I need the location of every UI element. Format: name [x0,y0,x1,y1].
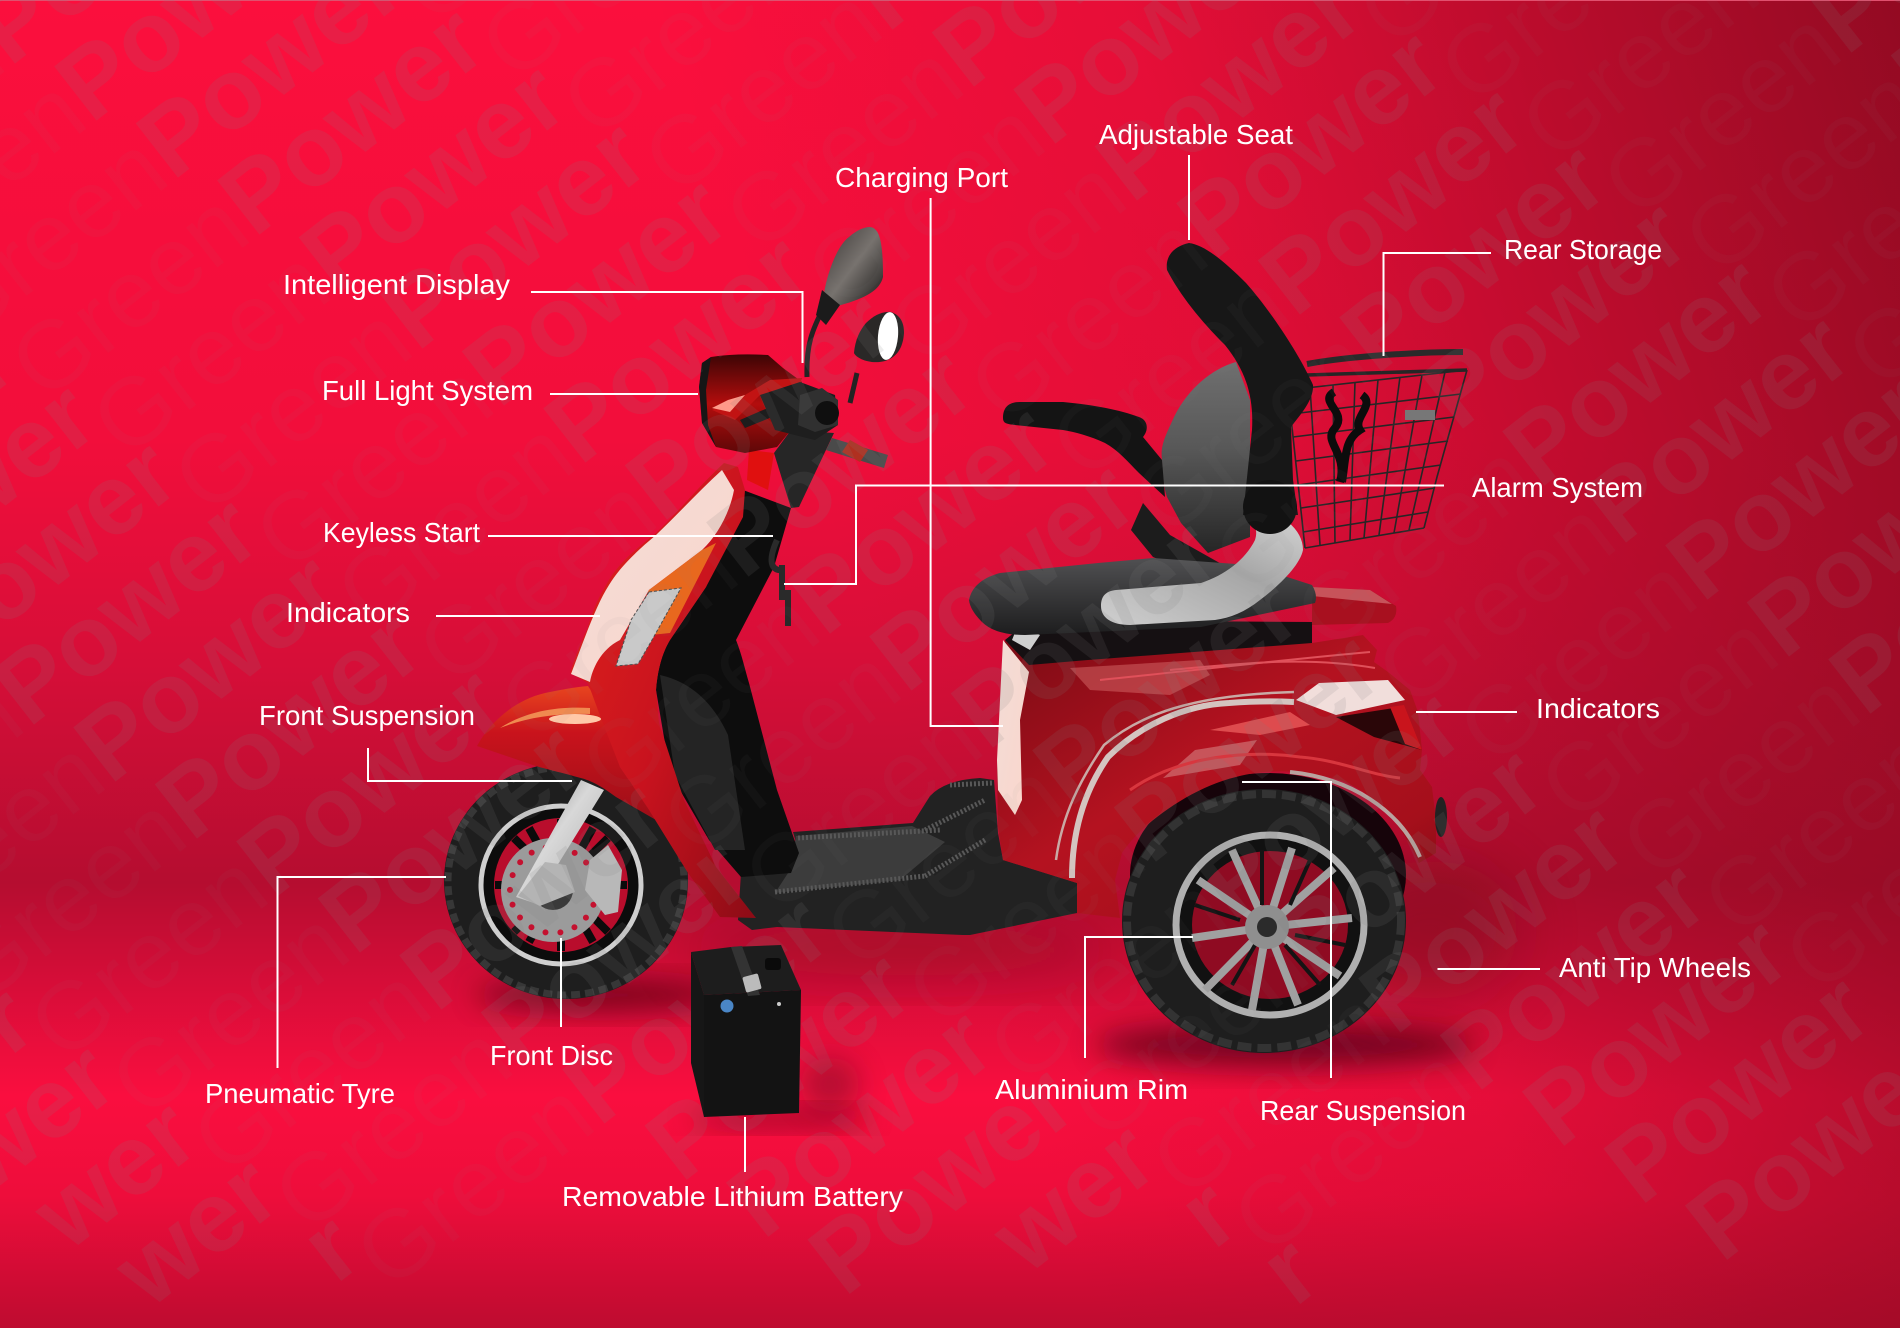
watermark: GreenPower repeated: GreenPower [1048,724,1564,1161]
silver seat arm [1101,522,1303,625]
watermark: GreenPower repeated: GreenPower [885,610,1401,1047]
label: Charging Port: Charging Port [835,162,1008,193]
watermark: GreenPower repeated: GreenPower [1192,177,1708,614]
front fender [477,686,656,820]
watermark: GreenPower repeated: Power [626,928,932,1201]
label: Keyless Start: Keyless Start [323,517,480,548]
rear panel highlight [997,640,1029,815]
front brake disc [501,838,605,942]
label: Indicators front: Indicators [286,597,410,628]
watermark: GreenPower repeated: r [280,1190,380,1303]
rear body trim stripes [1072,701,1294,878]
watermark: GreenPower repeated: r [1158,1156,1258,1269]
watermark: GreenPower repeated: GreenPower [478,325,993,762]
rear wheel [1122,789,1406,1053]
watermark: GreenPower repeated: GreenPower [1211,838,1727,1275]
display pod [699,354,802,453]
label: Alarm System: Alarm System [1472,472,1643,503]
label: Full Light System: Full Light System [322,375,533,406]
seat belt [1131,503,1225,577]
watermark: GreenPower repeated: wer [93,1133,299,1328]
armrest [1003,402,1165,497]
label: Front Disc [490,938,613,1071]
label: Rear Storage: Rear Storage [1504,234,1662,265]
mirror right [854,312,904,362]
rear tail light [1336,707,1422,750]
watermark: GreenPower repeated: wer [971,1099,1176,1294]
watermark: GreenPower repeated: Power [1504,894,1809,1167]
handlebar and mirrors [699,227,904,626]
watermark: GreenPower repeated: GreenPower [1130,781,1645,1218]
label: Anti Tip Wheels: Anti Tip Wheels [1559,952,1751,983]
front panel highlight [571,470,734,682]
battery strap [731,946,760,996]
label: Front Suspension: Front Suspension [259,700,475,731]
label: Pneumatic Tyre: Pneumatic Tyre [205,1078,395,1109]
watermark: GreenPower repeated: GreenPower [641,439,1156,876]
label: Intelligent Display: Intelligent Display [283,269,510,300]
watermark: GreenPower repeated: GreenPower [1111,120,1626,557]
watermark: GreenPower repeated: Power [708,985,1013,1258]
label: Intelligent Display [283,269,802,363]
watermark: GreenPower repeated: GreenPower [171,758,686,1195]
rear seat deck mechanics [1005,587,1396,670]
watermark: GreenPower repeated: GreenPower [1355,291,1871,728]
watermark: GreenPower repeated: GreenPower [334,872,849,1309]
front indicator [616,588,681,666]
watermark: GreenPower repeated: GreenPower [1274,234,1789,671]
watermark: GreenPower repeated: GreenPower [1029,63,1545,500]
watermark: GreenPower repeated: GreenPower [804,553,1319,990]
rear reflector [1435,797,1447,837]
headrest [1167,243,1313,515]
watermark: GreenPower repeated: GreenPower [948,6,1463,443]
mirror left [824,227,883,306]
key [772,540,788,626]
watermark: GreenPower repeated: GreenPower [252,815,768,1252]
watermark: GreenPower repeated: GreenPower [152,97,667,534]
front wheel [444,763,688,999]
watermark: GreenPower repeated: GreenPower [89,701,605,1138]
rear body [997,635,1447,918]
watermark: GreenPower repeated: GreenPower [233,154,749,591]
label: Pneumatic Tyre [205,877,446,1109]
footboard [738,778,1077,935]
watermark: GreenPower repeated: GreenPower [8,644,523,1081]
removable battery [691,945,801,1117]
watermark: GreenPower repeated: GreenPower [722,496,1238,933]
seat backrest [1162,362,1250,553]
watermark: GreenPower repeated: GreenPower [559,382,1075,819]
watermark: GreenPower repeated: Power [1585,951,1891,1224]
label: Removable Lithium Battery: Removable Lithium Battery [562,1181,903,1212]
label: Indicators rear: Indicators [1536,693,1660,724]
watermark: GreenPower repeated: GreenPower [70,40,586,477]
watermark: GreenPower repeated: GreenPower [967,667,1482,1104]
battery blue badge [720,1000,734,1012]
watermark: GreenPower repeated: wer [12,1076,217,1271]
watermark: GreenPower repeated: Power [789,1042,1095,1315]
front body panel [570,463,756,918]
handlebar grip [740,407,782,428]
rear arch interior [1130,773,1406,977]
label: Rear Suspension: Rear Suspension [1260,1095,1466,1126]
watermark: GreenPower repeated: GreenPower [315,211,830,648]
label: Rear Storage [1384,234,1662,356]
label: Rear Suspension [1242,782,1466,1126]
label: Front Disc: Front Disc [490,1040,613,1071]
front fork [516,780,604,903]
inner leg shield [656,490,799,877]
watermark: GreenPower repeated: r [1239,1213,1339,1326]
label: Front Suspension [259,700,572,781]
label: Adjustable Seat: Adjustable Seat [1099,119,1293,150]
label: Aluminium Rim [995,937,1193,1105]
watermark: GreenPower repeated: GreenPower [396,268,912,705]
scooter illustration [444,227,1467,1053]
label: Alarm System [784,472,1643,584]
seat cushion [969,558,1316,635]
label: Aluminium Rim: Aluminium Rim [995,1074,1188,1105]
rear basket [1288,352,1467,548]
label: Charging Port [835,162,1008,726]
